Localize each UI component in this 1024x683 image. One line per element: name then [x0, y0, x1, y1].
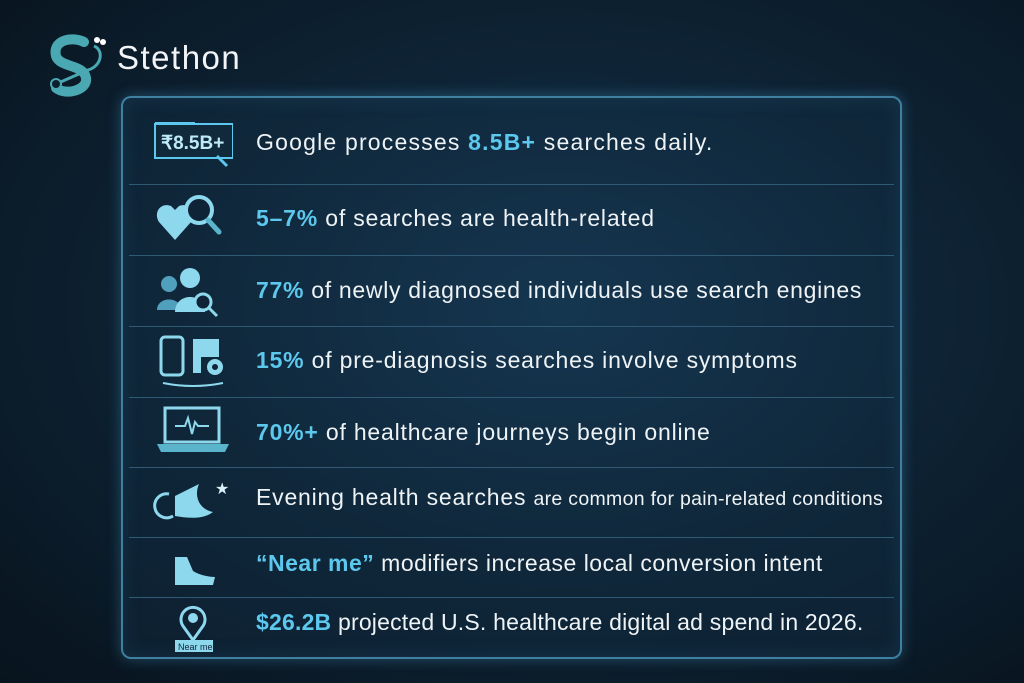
icon: 8.5B+ badge	[154, 122, 233, 167]
row 3	[157, 268, 862, 317]
row 2	[156, 195, 655, 240]
text: $26.2B projected U.S. healthcare digital ad spend in 2026.	[256, 609, 863, 635]
icon: near me pin	[175, 606, 213, 652]
text: 77% of newly diagnosed individuals use search engines	[256, 277, 862, 303]
row 6	[153, 481, 883, 520]
icon: laptop	[157, 406, 229, 452]
logo	[50, 34, 241, 97]
row 1	[154, 122, 713, 167]
row 4	[160, 336, 798, 387]
panel: stats	[121, 96, 902, 659]
icon: people search	[157, 268, 218, 317]
icon: phone and location	[160, 336, 224, 387]
text: 5–7% of searches are health-related	[256, 205, 655, 231]
icon: moon and star	[153, 481, 229, 520]
icon: 8.5B+ badge: ₹8.5B+	[161, 133, 224, 154]
text: Evening health searches are common for pain-related conditions	[256, 484, 883, 510]
icon: moon and star: ★	[215, 481, 229, 498]
text: 15% of pre-diagnosis searches involve symptoms	[256, 347, 798, 373]
icon: heart search	[156, 195, 222, 240]
row 5	[157, 406, 711, 452]
row 8	[175, 606, 863, 652]
brand name: Stethon	[117, 39, 241, 76]
text: “Near me” modifiers increase local conversion intent	[256, 550, 823, 576]
icon: foot	[175, 557, 215, 585]
text: 70%+ of healthcare journeys begin online	[256, 419, 711, 445]
icon: near me pin: Near me	[178, 642, 213, 652]
row 7	[175, 550, 823, 585]
text: Google processes 8.5B+ searches daily.	[256, 129, 713, 155]
icon: S stethoscope	[50, 34, 106, 97]
